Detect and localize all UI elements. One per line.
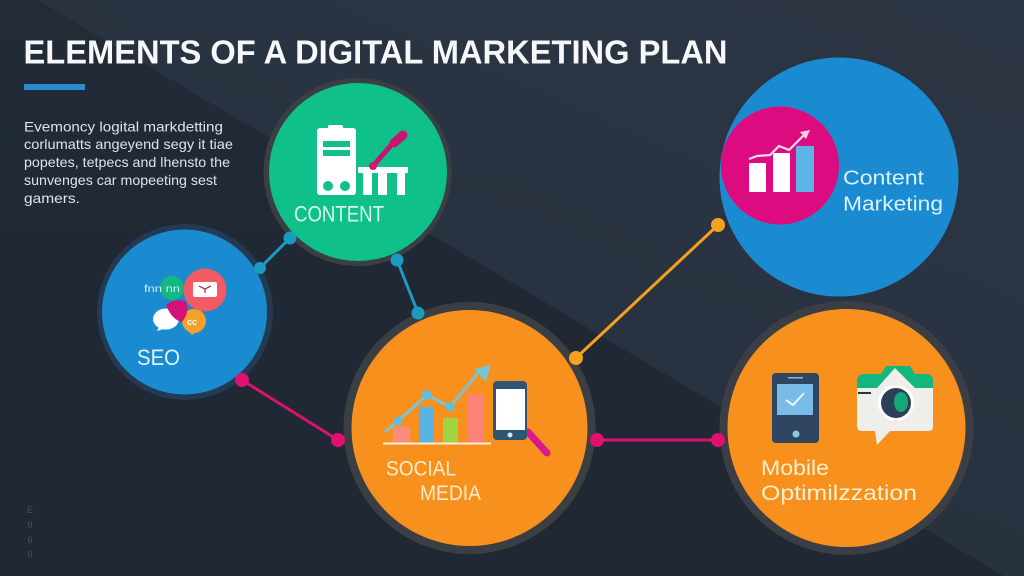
label: Mobile Optimization: Mobile xyxy=(761,457,829,480)
label: Content: CONTENT xyxy=(294,202,384,226)
faint vertical marks xyxy=(27,505,33,559)
connector: Social Media to Mobile Optimization xyxy=(590,433,725,447)
icon: social bubbles: fnn nn xyxy=(144,284,180,295)
icon: phone with magnifier xyxy=(493,381,547,453)
connector: SEO to Content xyxy=(254,232,296,274)
label: Mobile Optimization: Optimilzzation xyxy=(761,482,917,505)
label: Content Marketing xyxy=(843,168,943,216)
panel: Mobile Optimization xyxy=(720,301,974,555)
icon: social bubbles: cc xyxy=(187,317,197,327)
label: SEO: SEO xyxy=(137,345,180,370)
panel: Content Marketing xyxy=(720,58,958,296)
label: Social Media xyxy=(386,458,481,505)
intro text: gamers. xyxy=(24,190,80,206)
panel: Social Media xyxy=(344,302,596,554)
intro text xyxy=(24,118,233,206)
faint vertical marks: E xyxy=(27,505,33,515)
intro text: corlumatts angeyend segy it tiae xyxy=(24,136,233,152)
icon: pink chart badge xyxy=(721,106,839,224)
title: ELEMENTS OF A DIGITAL MARKETING PLAN xyxy=(24,34,728,70)
intro text: sunvenges car mopeeting sest xyxy=(24,172,217,188)
title underline xyxy=(24,84,85,90)
intro text: Evemoncy logital markdetting xyxy=(24,118,223,134)
label: Content Marketing: Marketing xyxy=(843,194,943,216)
faint vertical marks: 0 xyxy=(27,549,33,559)
label: Content Marketing: Content xyxy=(843,168,924,190)
icon: mobile check xyxy=(772,373,819,443)
faint vertical marks: 6 xyxy=(27,535,33,545)
panel: Content xyxy=(264,78,452,266)
connector: Content to Social Media xyxy=(390,254,424,320)
label: Social Media: MEDIA xyxy=(420,482,481,505)
icon: growth chart xyxy=(383,365,491,444)
label: Mobile Optimization xyxy=(761,457,917,505)
connector: Social Media to Content Marketing xyxy=(569,218,725,365)
faint vertical marks: 9 xyxy=(27,520,33,530)
icon: document and pen xyxy=(317,125,408,195)
panel: SEO xyxy=(97,224,273,400)
icon: social bubbles xyxy=(144,268,226,335)
intro text: popetes, tetpecs and lhensto the xyxy=(24,154,230,170)
icon: camera bubble xyxy=(857,366,933,445)
label: Social Media: SOCIAL xyxy=(386,458,456,480)
connector: SEO to Social Media xyxy=(235,373,345,447)
